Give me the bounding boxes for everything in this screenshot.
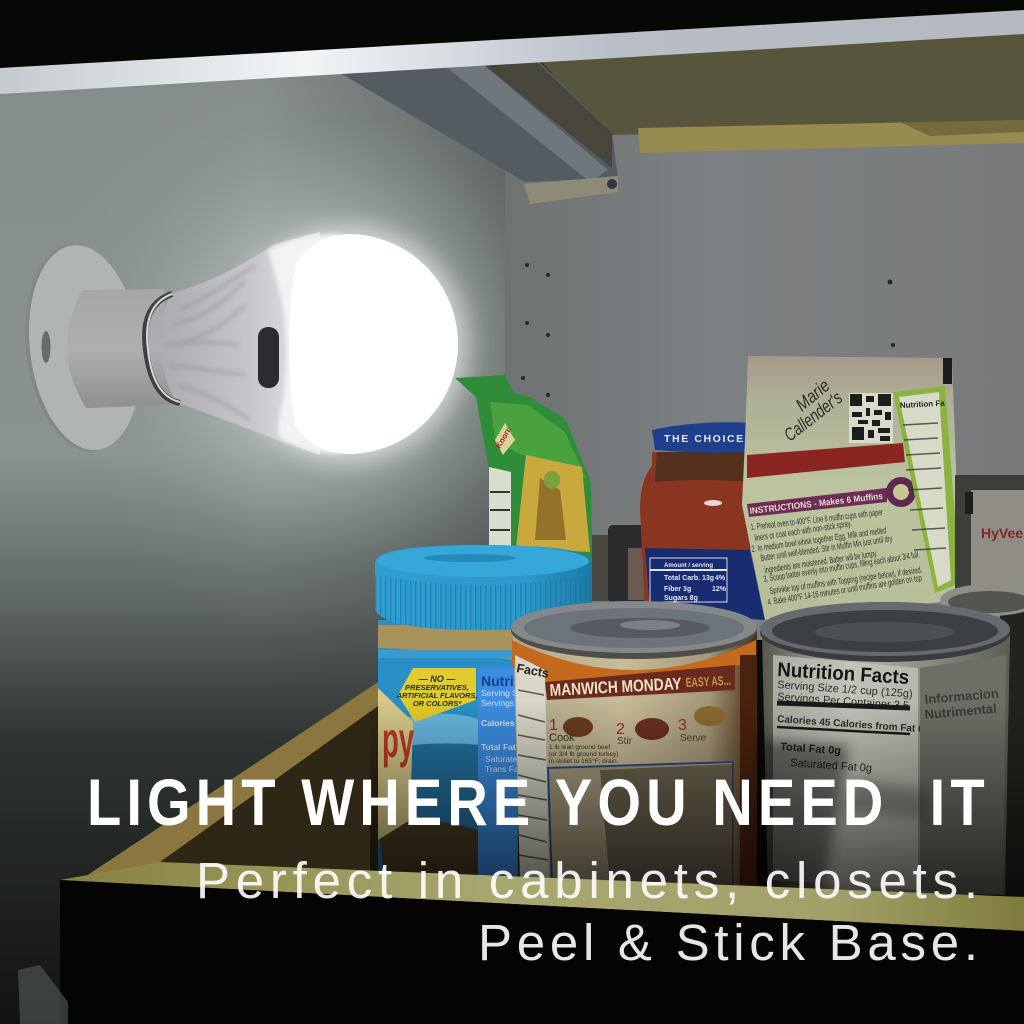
back right can: HyVee (981, 525, 1023, 541)
nutrition facts can: Saturated Fat 0g (790, 757, 872, 775)
packet side label: Nutrition Fa (900, 399, 945, 410)
jar nutrition panel: Serving Si (481, 688, 520, 698)
purple band (747, 488, 887, 517)
Manwich can (511, 601, 757, 890)
metal ring (145, 294, 180, 403)
instructions text: ingredients are moistened. Batter will be lumpy. (764, 548, 878, 575)
can right panel (920, 655, 1006, 895)
nutrition facts can: Total Fat 0g (780, 741, 841, 757)
jar white panel (378, 688, 414, 840)
soup packet (455, 375, 592, 560)
Marie Callender's packet: INSTRUCTIONS - Makes 6 Muffins (749, 491, 883, 516)
subheading text: Peel & Stick Base. (478, 914, 978, 971)
jar nutrition panel: Saturated (485, 754, 522, 764)
soup packet: Knorr (494, 427, 513, 450)
jar lid (652, 422, 750, 453)
instructions text: 4. Bake 400°F 14-16 minutes or until muffins are golden on top (767, 573, 922, 607)
bulb ribs (165, 265, 255, 420)
nutrition facts can: Servings Per Container 3.5 (777, 691, 909, 712)
instructions text: liners or coat each with non-stick spray. (754, 518, 852, 543)
drawer side wall (80, 682, 378, 880)
shadows on can (760, 740, 850, 900)
instructions text: 3. Scoop batter evenly into muffin cups, filling each about 3/4 full. (763, 549, 920, 584)
yellow badge: PRESERVATIVES, (405, 683, 469, 692)
floor corner detail (18, 965, 68, 1024)
wall screw holes (521, 263, 895, 397)
nutrition facts can: Serving Size 1/2 cup (125g) (777, 679, 913, 700)
Marie Callender's packet: Callender's (780, 388, 846, 445)
can right panel: Informacion (924, 686, 999, 707)
cooking steps: Stir (617, 736, 633, 747)
brand script: Marie (792, 375, 834, 415)
socket neck (67, 289, 170, 408)
cooking steps: 3 (678, 717, 687, 734)
pasta sauce jar (640, 422, 793, 620)
QR code (849, 393, 893, 443)
subheading text: Perfect in cabinets, closets. (196, 852, 978, 909)
back right can (955, 475, 1024, 590)
cooking steps: Serve (680, 733, 707, 744)
Marie Callender's packet (742, 356, 960, 620)
recipe box (548, 762, 733, 885)
nutrition facts can (760, 602, 1010, 900)
wall mount plate (14, 238, 152, 458)
subheading text (196, 852, 978, 971)
nutrition facts can: Calories 45 Calories from Fat 0 (777, 714, 924, 735)
instructions text: 1. Preheat oven to 400°F. Line 6 muffin cups with paper (750, 507, 883, 532)
drawer front face (60, 880, 1024, 1024)
jar nutrition label: 4% (715, 575, 726, 582)
red band (747, 443, 905, 478)
jar nutrition label: Sugars 8g (664, 595, 698, 602)
left nutrition strip: Facts (515, 661, 550, 681)
heading: LIGHT WHERE YOU NEED IT (87, 766, 985, 839)
jar nutrition panel: Trans Fat (485, 764, 522, 774)
jar white panel: py (382, 711, 414, 768)
instructions text: Sprinkle top of muffins with Topping (recipe below), if desired. (769, 565, 923, 596)
jar nutrition panel: Servings P (481, 698, 522, 708)
red banner: EASY AS... (685, 673, 731, 690)
pale band next to globe (268, 234, 340, 454)
instructions text: 2. In medium bowl whisk together Egg, Milk and melted (751, 525, 887, 554)
cooking steps: Cook (549, 732, 575, 744)
top shelf: edge, underside, slide bracket and wood batten (0, 0, 1024, 204)
cooking steps (549, 706, 726, 765)
drawer front board (60, 862, 1024, 931)
pasta sauce jar: THE CHOICE OF ITA (664, 433, 793, 445)
cooking steps: 1 (549, 717, 558, 734)
cooking steps: (or 3/4 lb ground turkey) (549, 751, 618, 758)
can right panel: Nutrimental (924, 701, 997, 722)
far tin behind jar (592, 525, 648, 603)
cooking steps: 2 (616, 721, 625, 738)
jar nutrition panel: Nutrit (481, 673, 519, 689)
jar nutrition label: 12% (712, 586, 727, 593)
left nutrition strip (515, 655, 550, 885)
jar nutrition label (645, 548, 765, 620)
packet side label (893, 386, 960, 593)
bulb halo (232, 226, 468, 462)
jar nutrition panel: Calories 19 (481, 718, 527, 728)
bottom shade over cans (370, 700, 1024, 900)
jar nutrition label: Fiber 3g (664, 586, 691, 593)
peanut butter jar (375, 545, 592, 880)
jar nutrition panel (478, 668, 527, 880)
yellow badge (396, 668, 477, 722)
jar nutrition panel: Total Fat 1 (481, 742, 523, 752)
red banner: MANWICH MONDAY (549, 674, 683, 700)
bulb switch (258, 327, 279, 388)
nutrition facts can: Nutrition Facts (777, 659, 910, 689)
can top (760, 602, 1010, 662)
cooking steps: 1 lb lean ground beef (549, 744, 610, 751)
instructions text: Butter until well-blended. Stir in Muffin Mix just until dry (760, 533, 893, 563)
cooking steps: in skillet to 165°F; drain. (549, 757, 619, 765)
bulb lit globe (289, 234, 458, 454)
jar nutrition label: Amount / serving (664, 563, 713, 569)
instructions text (750, 507, 923, 607)
can top (511, 601, 757, 659)
far right can (940, 584, 1024, 900)
yellow badge: OR COLORS* (413, 699, 462, 708)
light bulb fixture (14, 226, 468, 462)
bulb body (160, 232, 320, 455)
yellow badge: — NO — (418, 674, 456, 684)
blue lid (375, 545, 592, 630)
red banner (545, 665, 735, 700)
jar nutrition label: Total Carb. 13g (664, 575, 714, 582)
yellow badge: ARTIFICIAL FLAVORS, (396, 691, 477, 700)
